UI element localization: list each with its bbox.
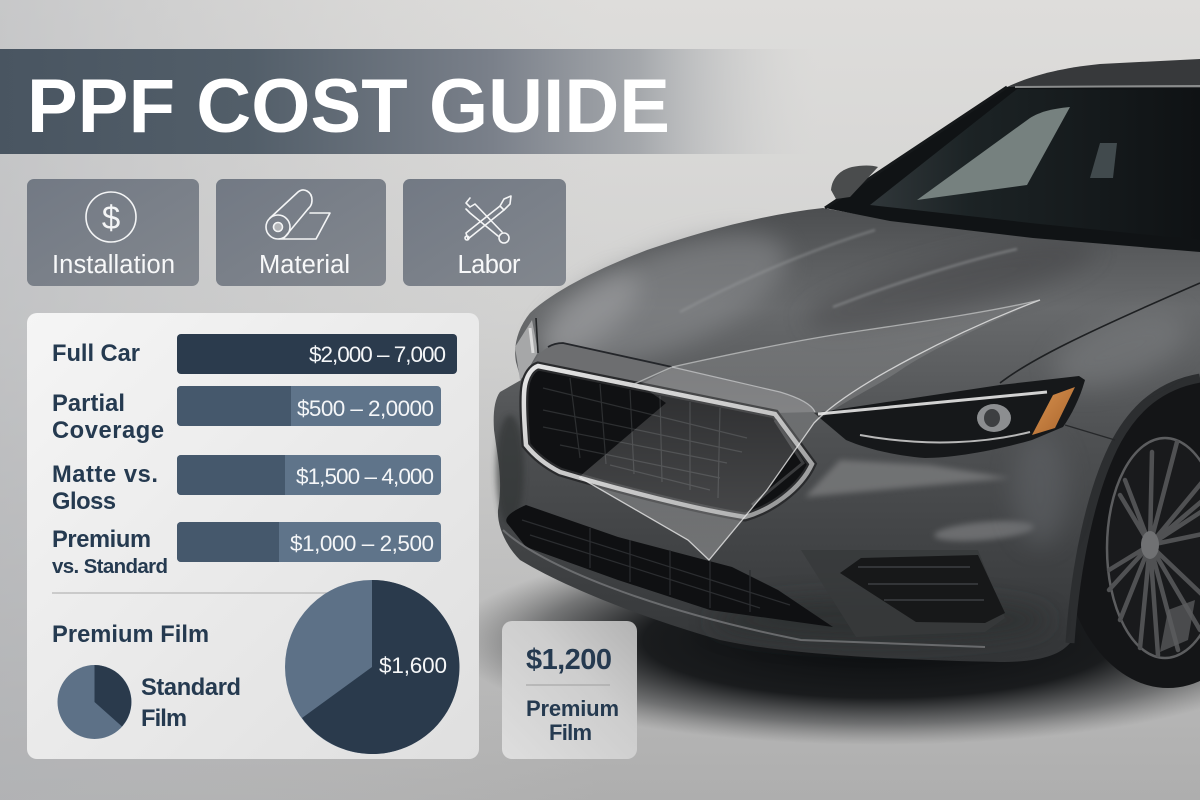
ground shadow <box>450 535 1200 745</box>
premium film label: Premium Film <box>52 622 209 648</box>
row: premium vs standard: $1,000 – 2,500 <box>290 531 434 556</box>
roof <box>1007 59 1200 88</box>
protective film <box>579 300 1040 560</box>
car body <box>494 208 1200 662</box>
callout: premium film price: Film <box>549 720 592 745</box>
row: full car: $2,000 – 7,000 <box>309 342 446 367</box>
callout: premium film price: $1,200 <box>526 644 612 676</box>
row: premium vs standard: Premium <box>52 527 151 553</box>
body seams <box>1000 283 1200 440</box>
title banner <box>0 49 820 154</box>
large pie chart: premium film: $1,600 <box>379 653 447 678</box>
row: partial coverage: Partial <box>52 391 125 417</box>
row: partial coverage: $500 – 2,0000 <box>297 396 434 421</box>
small pie chart: standard film <box>58 665 132 739</box>
row: matte vs gloss: $1,500 – 4,000 <box>296 464 434 489</box>
standard film label <box>141 675 241 732</box>
row: partial coverage: Coverage <box>52 418 164 444</box>
row: matte vs gloss: Matte vs. <box>52 462 158 488</box>
wheel arch lip <box>1070 378 1200 643</box>
fog lamp <box>801 550 1005 637</box>
row: partial coverage <box>52 386 441 444</box>
panel: cost breakdown <box>27 313 479 759</box>
callout: premium film price <box>502 621 637 759</box>
row: premium vs standard <box>52 522 441 578</box>
row: full car <box>52 334 457 374</box>
card: labor <box>403 179 566 286</box>
row: matte vs gloss <box>52 455 441 515</box>
standard film label: Film <box>141 706 187 732</box>
icon: crossed tools <box>465 196 511 243</box>
front grille <box>524 366 812 517</box>
lower grille <box>506 505 833 627</box>
callout: premium film price: Premium <box>526 696 619 721</box>
icon: film roll <box>266 190 330 239</box>
title: PPF COST GUIDE <box>27 64 670 149</box>
large pie chart: premium film <box>285 580 459 754</box>
card: material <box>216 179 386 286</box>
row: premium vs standard: vs. Standard <box>52 555 168 578</box>
standard film label: Standard <box>141 675 241 701</box>
icon: dollar coin: $ <box>102 199 120 236</box>
headlight <box>814 376 1085 458</box>
card: labor: Labor <box>458 251 521 279</box>
row: matte vs gloss: Gloss <box>52 489 116 515</box>
mirror <box>831 166 878 199</box>
front wheel <box>1060 372 1200 688</box>
card: installation <box>27 179 199 286</box>
car photo illustration <box>450 59 1200 745</box>
card: installation: Installation <box>52 251 175 279</box>
row: full car: Full Car <box>52 341 140 367</box>
bumper lip highlight <box>503 530 985 647</box>
nose tip <box>515 320 538 380</box>
icon: dollar coin <box>86 192 136 242</box>
hood lip <box>530 343 815 413</box>
windshield <box>825 86 1200 252</box>
card: material: Material <box>259 251 350 279</box>
body highlights <box>496 207 1196 642</box>
